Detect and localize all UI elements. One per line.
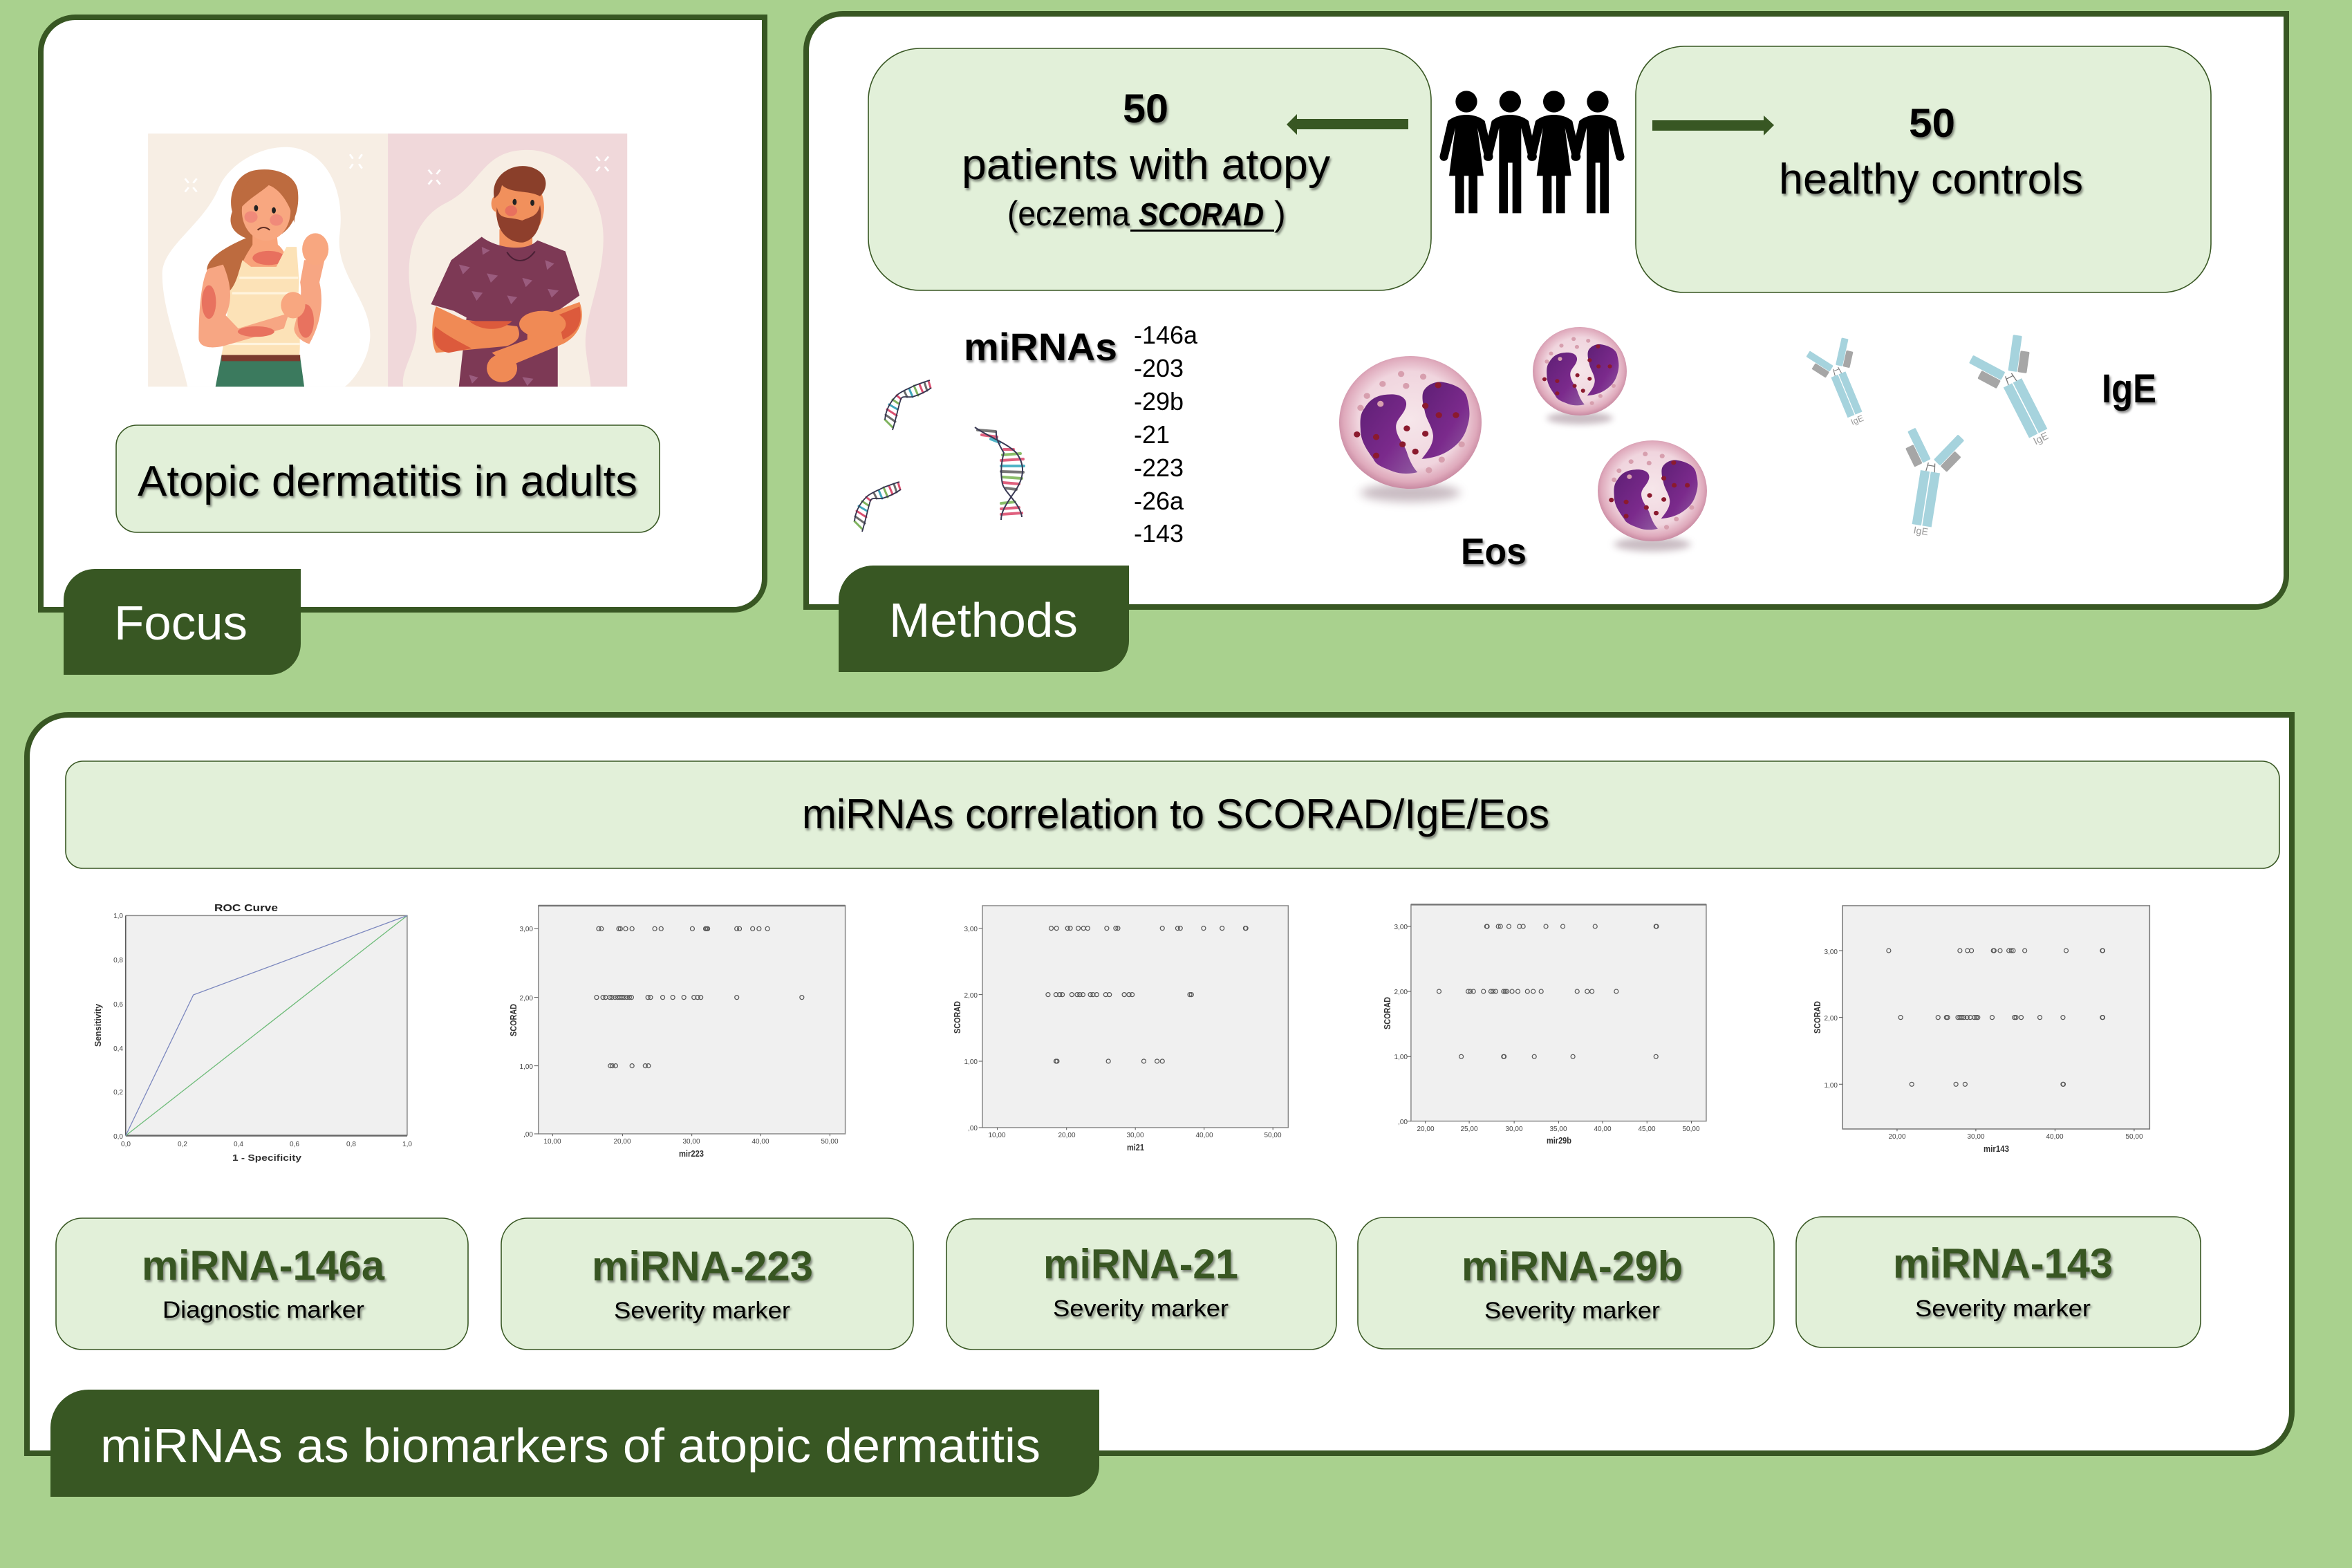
icon: eosinophil large [1339, 356, 1482, 502]
icon: IgE antibody two [1959, 328, 2078, 461]
mir143 y axis title: SCORAD [1812, 1001, 1822, 1034]
mir29b x axis labels: 40,00 [1594, 1126, 1612, 1133]
methods panel frame [806, 14, 2286, 607]
pill: atopic dermatitis in adults [116, 425, 660, 532]
mir223 x axis labels: 50,00 [821, 1138, 839, 1146]
card: miRNA-223: miRNA-223 [592, 1243, 813, 1289]
mir29b x axis labels: 30,00 [1505, 1126, 1523, 1133]
mir143 x axis labels: 50,00 [2125, 1133, 2143, 1141]
list: miRNA identifiers [1134, 321, 1198, 548]
ROC y axis labels: 0,0 [113, 1133, 123, 1141]
mir29b y axis labels: 1,00 [1394, 1054, 1408, 1061]
mir143 y axis labels [1824, 949, 1838, 1090]
mir223 plot and points [534, 906, 846, 1136]
list: miRNA identifiers: -223 [1134, 454, 1184, 482]
mi21 plot and points [979, 906, 1288, 1130]
mi21 x axis labels: 10,00 [988, 1132, 1006, 1139]
list: miRNA identifiers: -21 [1134, 420, 1170, 449]
chart: scatter mi21 [952, 906, 1288, 1152]
chart: ROC curve [93, 902, 412, 1163]
mi21 x axis labels [988, 1132, 1282, 1139]
mir143 x axis labels: 20,00 [1888, 1133, 1906, 1141]
tab: methods [839, 566, 1129, 672]
icon: large RNA strand [975, 427, 1024, 520]
pill: healthy controls: 50 [1909, 101, 1955, 146]
pill: patients with atopy: patients with atopy [962, 141, 1330, 189]
mi21 y axis labels: ,00 [968, 1125, 978, 1132]
pill: patients with atopy: 50 [1123, 86, 1168, 131]
icon: small RNA strand [885, 380, 931, 430]
card: miRNA-143: Severity marker [1915, 1296, 2091, 1322]
label: IgE: IgE [2102, 366, 2156, 411]
mi21 x axis labels: 30,00 [1126, 1132, 1144, 1139]
heading pill: miRNAs correlation [66, 761, 2279, 868]
card: miRNA-143: miRNA-143 [1893, 1240, 2113, 1287]
panel: focus [41, 17, 765, 675]
mir223 y axis labels: 1,00 [520, 1063, 533, 1071]
pill: patients with atopy: SCORAD [1139, 196, 1264, 232]
ROC x axis labels: 0,0 [121, 1141, 131, 1148]
ROC y axis labels: 0,4 [113, 1045, 123, 1053]
panel: methods [806, 14, 2286, 672]
mi21 x axis labels: 40,00 [1195, 1132, 1213, 1139]
mir223 x axis labels: 30,00 [682, 1138, 700, 1146]
icon: small RNA strand lower [855, 482, 901, 532]
mir143 x axis labels: 40,00 [2046, 1133, 2064, 1141]
mir223 y axis labels [520, 926, 533, 1139]
mir223 y axis labels: ,00 [523, 1131, 533, 1139]
mi21 x axis labels: 50,00 [1264, 1132, 1282, 1139]
list: miRNA identifiers: -146a [1134, 321, 1198, 349]
mir223 x axis labels: 10,00 [543, 1138, 561, 1146]
mir29b x axis title: mir29b [1547, 1135, 1571, 1146]
mi21 y axis title: SCORAD [952, 1001, 962, 1034]
pill: healthy controls: healthy controls [1779, 156, 2083, 203]
ROC title: ROC Curve [214, 902, 278, 914]
mir143 y axis labels: 2,00 [1824, 1015, 1838, 1023]
ROC y axis labels [113, 913, 123, 1141]
mir29b y axis labels: 2,00 [1394, 989, 1408, 996]
icon: IgE antibody one [1799, 333, 1886, 436]
list: miRNA identifiers: -29b [1134, 387, 1184, 416]
list: miRNA identifiers: -26a [1134, 487, 1184, 515]
ROC x axis labels: 0,2 [178, 1141, 187, 1148]
ROC x axis title: 1 - Specificity [232, 1152, 302, 1163]
mir223 x axis labels: 40,00 [752, 1138, 769, 1146]
mir29b x axis labels: 35,00 [1549, 1126, 1567, 1133]
mir29b y axis title: SCORAD [1382, 997, 1392, 1029]
mir29b plot and points [1408, 904, 1706, 1123]
mir143 x axis title: mir143 [1984, 1144, 2009, 1154]
mir143 y axis labels: 3,00 [1824, 949, 1838, 956]
mir223 y axis title: SCORAD [508, 1004, 519, 1036]
card: miRNA-223: Severity marker [614, 1298, 790, 1324]
mir29b y axis labels: ,00 [1398, 1119, 1408, 1126]
icon: IgE antibody three [1884, 425, 1972, 543]
mir29b x axis labels: 50,00 [1682, 1126, 1700, 1133]
icon: IgE antibody two: IgE [2032, 431, 2051, 447]
ROC y axis title: Sensitivity [93, 1003, 103, 1047]
icon: group of people [1439, 91, 1625, 213]
ROC x axis labels [121, 1141, 412, 1148]
mir29b x axis labels: 45,00 [1638, 1126, 1656, 1133]
heading pill: miRNAs correlation: miRNAs correlation to SCORAD/IgE/Eos [802, 791, 1549, 837]
ROC x axis labels: 0,8 [346, 1141, 356, 1148]
card: miRNA-146a [56, 1218, 468, 1350]
ROC x axis labels: 0,4 [234, 1141, 243, 1148]
card: miRNA-146a: Diagnostic marker [162, 1297, 364, 1323]
mir223 x axis title: mir223 [679, 1148, 704, 1159]
mi21 x axis labels: 20,00 [1058, 1132, 1076, 1139]
chart: scatter mir223 [508, 906, 846, 1159]
ROC x axis labels: 0,6 [290, 1141, 299, 1148]
heading: miRNAs: miRNAs [964, 325, 1117, 368]
mir143 plot and points [1839, 906, 2149, 1131]
ROC x axis labels: 1,0 [402, 1141, 412, 1148]
mi21 y axis labels: 3,00 [964, 926, 978, 933]
illustration: adults with atopic dermatitis [148, 133, 627, 386]
icon: eosinophil top [1533, 327, 1627, 424]
mir29b x axis labels: 25,00 [1460, 1126, 1478, 1133]
biomarkers panel frame [27, 715, 2292, 1453]
mi21 y axis labels: 2,00 [964, 992, 978, 1000]
mi21 x axis title: mi21 [1127, 1142, 1144, 1152]
mi21 y axis labels [964, 926, 978, 1132]
card: miRNA-29b [1358, 1217, 1774, 1349]
chart: scatter mir143 [1812, 906, 2149, 1154]
mir223 x axis labels [543, 1138, 839, 1146]
focus panel frame [41, 17, 765, 610]
tab: miRNAs as biomarkers of atopic dermatitis [50, 1390, 1099, 1497]
mir143 x axis labels [1888, 1133, 2143, 1141]
mir29b y axis labels [1394, 924, 1408, 1126]
mir29b x axis labels: 20,00 [1417, 1126, 1435, 1133]
card: miRNA-21: miRNA-21 [1043, 1241, 1238, 1287]
mir223 y axis labels: 2,00 [520, 995, 533, 1002]
label: Eos: Eos [1461, 531, 1527, 572]
card: miRNA-21 [946, 1219, 1336, 1350]
pill: patients with atopy: (eczema [1007, 194, 1130, 233]
arrow: to controls [1652, 115, 1774, 136]
mir143 y axis labels: 1,00 [1824, 1082, 1838, 1090]
pill: patients with atopy [868, 48, 1431, 290]
tab: focus [64, 569, 301, 675]
card: miRNA-21: Severity marker [1053, 1296, 1229, 1322]
icon: eosinophil bottom [1598, 440, 1707, 552]
tab: methods: Methods [889, 593, 1078, 647]
mir223 x axis labels: 20,00 [613, 1138, 631, 1146]
list: miRNA identifiers: -143 [1134, 519, 1184, 548]
mir29b y axis labels: 3,00 [1394, 924, 1408, 931]
icon: IgE antibody one: IgE [1849, 413, 1865, 427]
ROC y axis labels: 1,0 [113, 913, 123, 920]
pill: atopic dermatitis in adults: Atopic dermatitis in adults [138, 458, 637, 505]
pill: patients with atopy: ) [1274, 194, 1286, 233]
ROC plot area [126, 915, 407, 1136]
mir143 x axis labels: 30,00 [1967, 1133, 1985, 1141]
card: miRNA-29b: miRNA-29b [1462, 1243, 1683, 1289]
tab: focus: Focus [114, 596, 248, 650]
panel: miRNAs as biomarkers [27, 715, 2292, 1497]
list: miRNA identifiers: -203 [1134, 354, 1184, 382]
chart: scatter mir29b [1382, 904, 1706, 1146]
icon: IgE antibody three: IgE [1913, 525, 1929, 538]
mir223 y axis labels: 3,00 [520, 926, 533, 933]
card: miRNA-143 [1796, 1217, 2201, 1347]
ROC y axis labels: 0,2 [113, 1089, 123, 1096]
mi21 y axis labels: 1,00 [964, 1058, 978, 1066]
card: miRNA-146a: miRNA-146a [142, 1242, 385, 1289]
arrow: to patients [1287, 114, 1408, 135]
card: miRNA-223 [501, 1218, 913, 1350]
mir29b x axis labels [1417, 1126, 1700, 1133]
tab: miRNAs as biomarkers of atopic dermatitis: miRNAs as biomarkers of atopic dermatitis [100, 1419, 1040, 1473]
pill: healthy controls [1636, 46, 2211, 292]
card: miRNA-29b: Severity marker [1484, 1298, 1660, 1324]
ROC y axis labels: 0,6 [113, 1001, 123, 1009]
ROC y axis labels: 0,8 [113, 957, 123, 964]
